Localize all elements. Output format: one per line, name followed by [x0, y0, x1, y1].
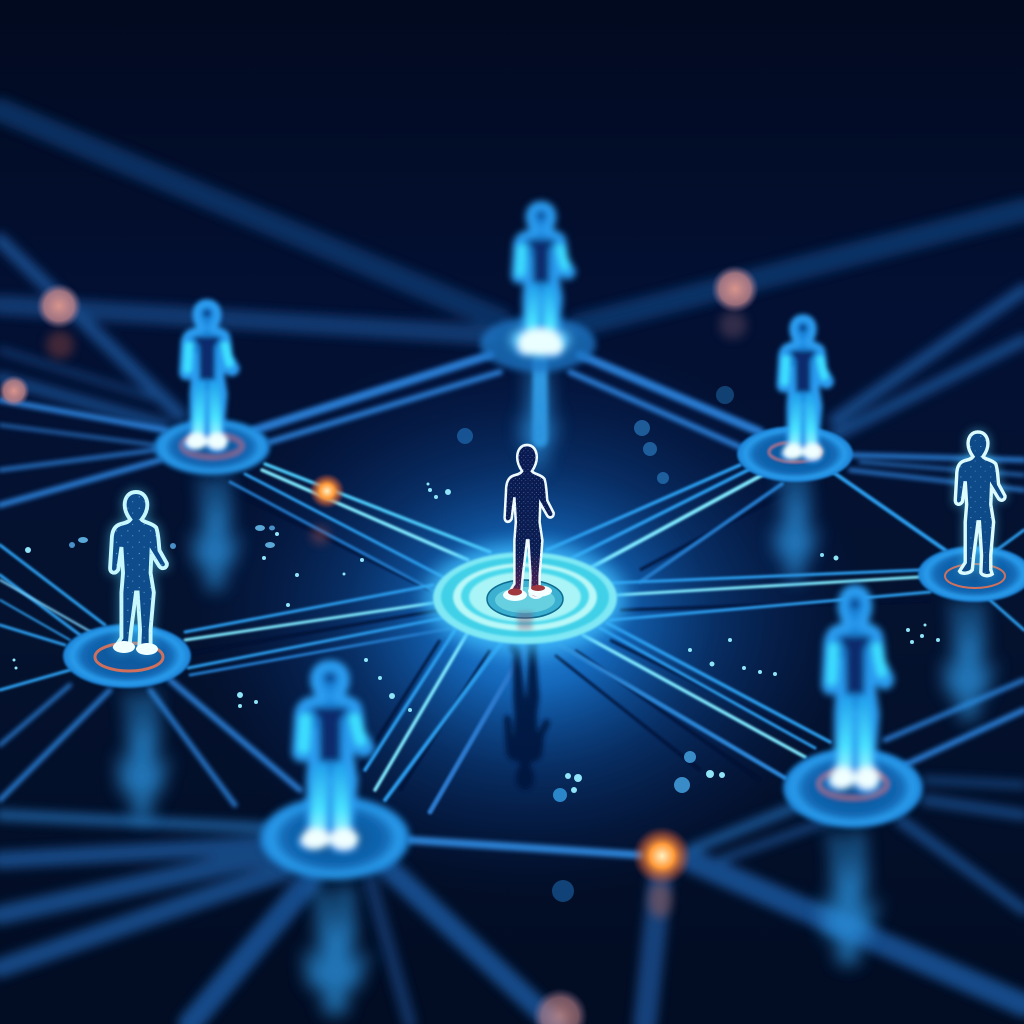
person: left: [110, 492, 167, 655]
person: right: [955, 432, 1005, 576]
sharp connection lines: [0, 465, 1024, 812]
dark line shadows beneath center: [180, 480, 930, 790]
person: lower right, blurred: [826, 590, 889, 789]
node disc: lower right: [783, 748, 923, 828]
node disc: right: [918, 546, 1024, 602]
node disc: center hub: [425, 544, 625, 652]
person: center: [503, 445, 554, 601]
glowing node: pink far left: [0, 375, 30, 407]
scattered light particles: [12, 386, 940, 902]
glowing node: pink bottom: [532, 988, 588, 1024]
mid-depth connection lines: [0, 355, 1024, 855]
person: lower left, blurred: [297, 665, 369, 849]
person: top, blurred: [515, 205, 571, 355]
glowing node: pink upper left: [36, 283, 82, 359]
node disc: upper right: [737, 426, 853, 482]
glowing node: orange upper left: [309, 473, 345, 544]
node disc: left: [63, 624, 191, 688]
person: upper right, slightly blurred: [780, 318, 830, 459]
node disc: top: [480, 316, 596, 372]
reflection: people mirrored under discs: [118, 361, 997, 1015]
person: upper left, blurred: [183, 303, 236, 449]
glowing node: pink upper right: [711, 265, 759, 339]
glowing node: orange lower center: [632, 826, 692, 918]
node disc: lower left: [260, 796, 410, 880]
bright highlighted lines: [0, 464, 920, 790]
reflection: central person: [504, 641, 550, 790]
node disc: upper left: [154, 419, 270, 475]
